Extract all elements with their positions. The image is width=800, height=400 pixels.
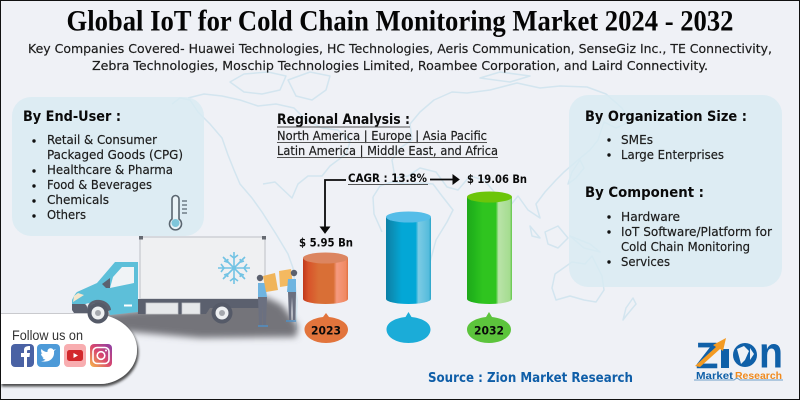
title: Global IoT for Cold Chain Monitoring Market 2024 - 2032 xyxy=(66,6,734,38)
cargo box xyxy=(139,236,266,299)
truck ground shadow xyxy=(86,297,298,338)
wordmark letters xyxy=(695,328,783,378)
workers with boxes xyxy=(257,269,297,326)
list: end-user segments: Retail & Consumer xyxy=(47,133,157,147)
subtitle: key companies: Zebra Technologies, Moschip Technologies Limited, Roambee Corporation, and Laird Connectivity. xyxy=(92,58,708,73)
list: organization sizes xyxy=(607,133,724,162)
heading: by component: By Component : xyxy=(585,185,704,201)
list: end-user segments: Healthcare & Pharma xyxy=(47,163,173,177)
icon: thermometer xyxy=(170,196,187,230)
list: end-user segments xyxy=(32,133,183,222)
panel: right segments xyxy=(569,95,782,287)
icon: twitter xyxy=(37,344,60,367)
heading: by end-user: By End-User : xyxy=(23,109,121,125)
icon: facebook xyxy=(11,344,34,367)
list: components: Cold Chain Monitoring xyxy=(621,240,750,254)
follow us text: Follow us on xyxy=(12,328,83,343)
source: Source : Zion Market Research xyxy=(428,371,633,386)
year badge: 2023: 2023 xyxy=(311,324,341,338)
list: organization sizes: Large Enterprises xyxy=(621,148,724,162)
world map watermark xyxy=(172,72,636,330)
chassis xyxy=(137,299,260,314)
list: components: IoT Software/Platform for xyxy=(621,225,772,239)
year badge: 2023 xyxy=(304,313,348,343)
list: end-user segments: Food & Beverages xyxy=(47,178,152,192)
list: components xyxy=(607,210,772,269)
value: 2023: $ 5.95 Bn xyxy=(299,236,353,250)
year badge: middle xyxy=(386,312,430,343)
heading: by organization size: By Organization Size : xyxy=(585,109,747,125)
follow us panel xyxy=(0,314,137,384)
list: end-user segments: Packaged Goods (CPG) xyxy=(47,148,183,162)
year badge: 2032 xyxy=(467,312,511,343)
bumper xyxy=(72,304,87,313)
wordmark letters: Z xyxy=(696,335,718,376)
panel: by end-user xyxy=(12,97,204,236)
subtitle: key companies xyxy=(28,41,772,73)
wheels xyxy=(88,302,232,324)
icon: instagram xyxy=(90,344,112,367)
cagr label with arrows: CAGR : 13.8% xyxy=(348,171,427,185)
regional analysis: North America | Europe | Asia Pacific xyxy=(277,129,487,143)
list: end-user segments: Chemicals xyxy=(47,193,109,207)
logo: zion market research xyxy=(694,328,783,382)
logo: zion market research: Research xyxy=(735,370,782,382)
value: 2032: $ 19.06 Bn xyxy=(467,172,527,186)
bar: 2032 cylinder xyxy=(467,192,512,304)
logo: zion market research: Market xyxy=(696,370,734,382)
subtitle: key companies: Key Companies Covered- Huawei Technologies, HC Technologies, Aeris Communication, SenseGiz Inc., TE Connectivity, xyxy=(28,41,772,56)
list: components: Services xyxy=(621,255,670,269)
bar: middle cylinder xyxy=(386,212,431,304)
regional analysis xyxy=(277,112,498,158)
truck illustration xyxy=(72,236,297,326)
cagr label with arrows xyxy=(320,171,459,233)
regional analysis: Latin America | Middle East, and Africa xyxy=(277,144,498,158)
headlight xyxy=(73,293,84,302)
list: components: Hardware xyxy=(621,210,680,224)
list: organization sizes: SMEs xyxy=(621,133,653,147)
year badge: 2032: 2032 xyxy=(474,324,504,338)
bar: 2023 cylinder xyxy=(303,252,348,304)
icon: youtube xyxy=(64,344,86,367)
cab window xyxy=(110,267,134,288)
regional analysis: Regional Analysis : xyxy=(277,112,410,128)
cab xyxy=(72,262,138,315)
wordmark letters: n xyxy=(759,328,783,378)
list: end-user segments: Others xyxy=(47,208,86,222)
cab mirror xyxy=(102,278,110,288)
icon: snowflake xyxy=(218,252,250,284)
arrow: cagr to 2032 xyxy=(430,175,459,184)
arrow: cagr to 2023 xyxy=(320,180,346,233)
